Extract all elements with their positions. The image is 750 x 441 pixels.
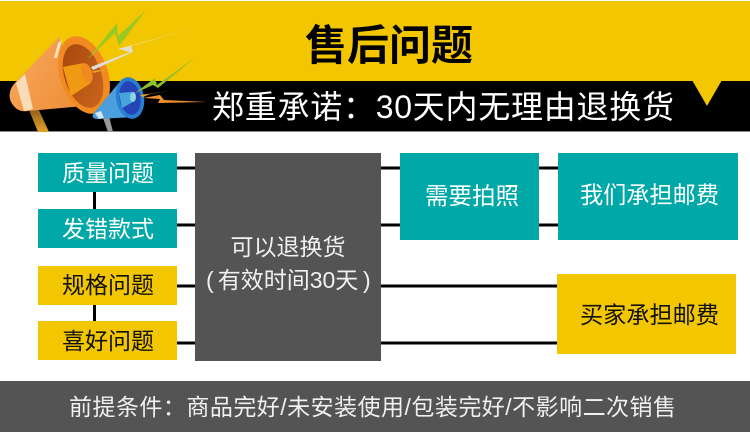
box: buyer pays postage [557, 274, 736, 354]
icon: small blue megaphone [93, 75, 147, 132]
panel: returns accepted [195, 153, 381, 361]
box: we pay postage: 我们承担邮费 [580, 182, 719, 208]
title: 售后问题 [305, 22, 473, 69]
box: size problem: 规格问题 [62, 272, 154, 298]
box: buyer pays postage: 买家承担邮费 [580, 302, 719, 328]
panel: returns accepted: 可以退换货 [230, 234, 346, 260]
subtitle: 郑重承诺：30天内无理由退换货 [212, 89, 674, 125]
footer bar [0, 381, 750, 432]
box: wrong style sent [38, 209, 177, 248]
box: quality problem: 质量问题 [62, 160, 154, 186]
icon: large orange megaphone [10, 30, 119, 132]
box: photo required [400, 153, 539, 240]
box: preference problem: 喜好问题 [62, 328, 154, 354]
box: size problem [38, 266, 177, 305]
panel: returns accepted: ( [206, 267, 214, 293]
panel: returns accepted: ) [363, 267, 371, 293]
box: wrong style sent: 发错款式 [62, 216, 154, 242]
footer conditions text: 前提条件：商品完好/未安装使用/包装完好/不影响二次销售 [69, 394, 676, 420]
box: preference problem [38, 321, 177, 360]
box: quality problem [38, 153, 177, 192]
connector lines [93, 166, 558, 344]
icon: lightning bolts [87, 10, 207, 103]
panel: returns accepted: 有效时间30天 [218, 267, 358, 293]
header banner [0, 1, 750, 132]
box: we pay postage [558, 153, 738, 240]
box: photo required: 需要拍照 [425, 183, 519, 209]
